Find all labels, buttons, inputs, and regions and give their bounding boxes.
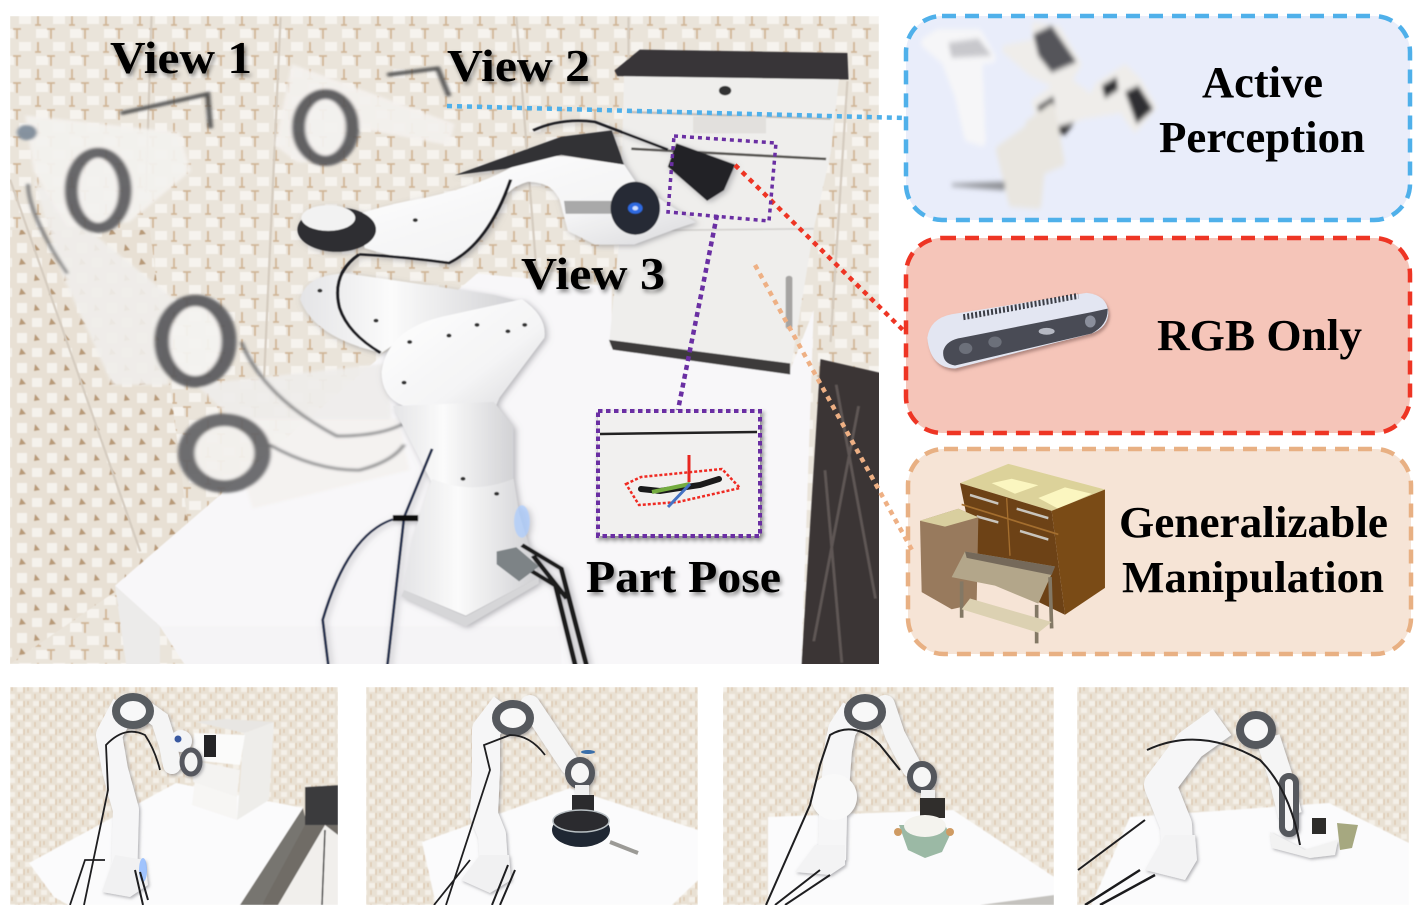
- dark floor area: [801, 359, 880, 665]
- label: Active Perception: Perception: [1159, 113, 1365, 162]
- label: Active Perception: [1159, 58, 1365, 162]
- label: RGB Only: RGB Only: [1157, 311, 1362, 360]
- connector: peach dotted to generalizable manipulation: [755, 265, 912, 550]
- callout: camera region box: [668, 136, 776, 221]
- panel: part pose inset: [598, 411, 760, 536]
- heading: View 1: View 1: [110, 32, 252, 83]
- icon: robot arm poses: [925, 26, 1153, 205]
- label: Generalizable Manipulation: Manipulation: [1122, 553, 1384, 602]
- ghost arm poses: [17, 64, 455, 509]
- panel: RGB only: [906, 238, 1410, 433]
- icon: depth camera: [927, 293, 1108, 369]
- label: Active Perception: Active: [1202, 58, 1323, 107]
- connector: purple dotted to part pose inset: [678, 215, 717, 410]
- heading: View 3: View 3: [521, 248, 665, 299]
- panel: active perception: [906, 16, 1410, 220]
- photo: pan task: [366, 687, 698, 905]
- photo: drawer task: [10, 687, 338, 905]
- photo: pot task: [723, 687, 1054, 905]
- connector: red dotted to RGB only: [735, 165, 905, 332]
- cabinet: [609, 50, 849, 374]
- panel: main robot photo: [10, 16, 880, 667]
- main robot arm: [297, 121, 735, 667]
- connector: blue dotted to active perception: [447, 106, 905, 118]
- label: Generalizable Manipulation: [1119, 498, 1388, 602]
- label: Generalizable Manipulation: Generalizable: [1119, 498, 1388, 547]
- panel: generalizable manipulation: [908, 449, 1411, 654]
- table: [115, 274, 814, 665]
- icon: furniture models: [920, 464, 1105, 643]
- photo: mug task: [1077, 687, 1409, 905]
- label: Part Pose: Part Pose: [586, 551, 781, 602]
- heading: View 2: View 2: [447, 40, 590, 91]
